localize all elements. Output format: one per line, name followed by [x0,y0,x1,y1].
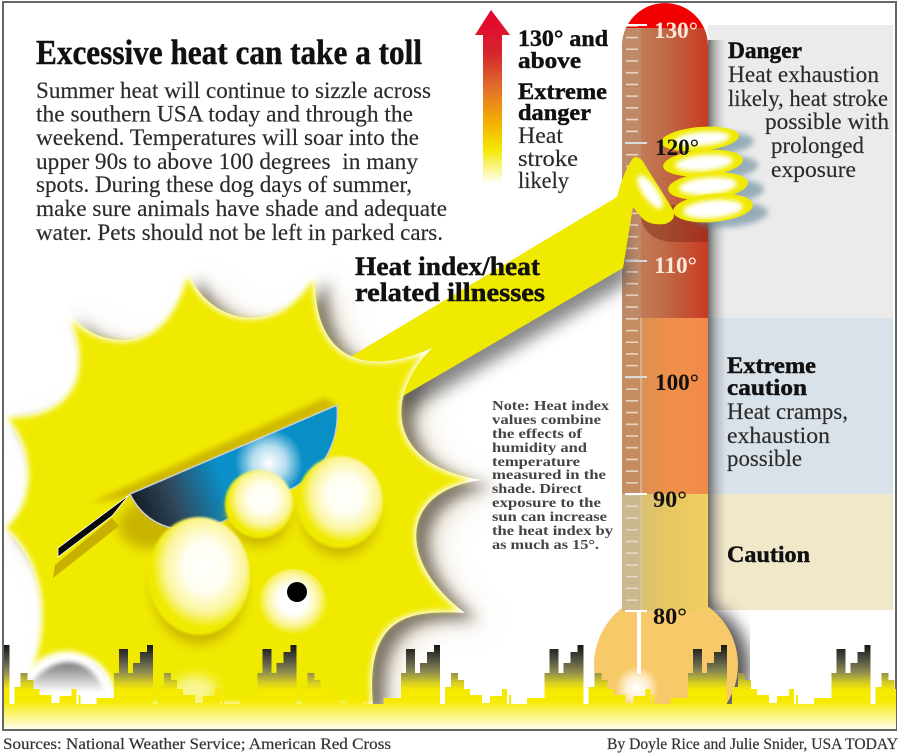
label: extreme danger: Extreme [518,79,607,104]
sun ambient beige shadow [100,286,490,704]
lower left valley [12,656,113,705]
label: caution: Caution [727,542,810,567]
intro text block: upper 90s to above 100 degrees in many [36,149,418,174]
label: danger: Danger [728,38,802,63]
panel: danger band [708,25,893,318]
note text: measured in the [492,467,606,482]
label: extreme caution: possible [727,446,802,471]
bulb shadow [708,596,750,704]
note text: Note: Heat index [492,398,609,413]
label: extreme caution: exhaustion [727,423,831,448]
panel: extreme caution band [708,318,893,494]
tick marks [625,25,647,611]
note text: shade. Direct [492,481,583,496]
finger 2 [662,147,744,179]
label: extreme danger: Heat [518,123,564,148]
thermometer degree labels [653,18,699,629]
intro text block: weekend. Temperatures will soar into the [36,125,419,150]
lens underside shadow [118,501,182,549]
label: danger: exposure [771,157,856,182]
intro text block: water. Pets should not be left in parked cars. [36,220,443,245]
sun beam arm [340,157,674,396]
thermometer degree labels: 120° [655,135,699,160]
thermometer degree labels: 130° [654,18,698,43]
note text: temperature [492,454,580,469]
finger shadows [677,130,769,230]
note text: exposure to the [492,495,601,510]
label: danger: likely, heat stroke [728,86,888,111]
source credit: Sources: National Weather Service; American Red Cross [3,736,391,753]
thermometer bulb [594,606,738,704]
eye [259,569,327,637]
arrow: rising heat [475,10,510,184]
note text: sun can increase [492,509,607,524]
label: extreme danger: likely [518,168,569,193]
byline: By Doyle Rice and Julie Snider, USA TODAY [607,736,898,753]
thumb highlight [633,172,667,212]
label: extreme danger: above [518,48,581,73]
finger 4 [672,191,754,225]
heat index heading [355,252,545,307]
sun shadow [16,277,495,712]
small lower glow [173,676,217,704]
note text: as much as 15°. [492,537,599,552]
label: extreme caution [727,353,848,471]
hand shadow on tube [640,205,708,242]
thermometer tube [620,0,712,611]
thermometer degree labels: 100° [655,370,699,395]
thermometer [594,0,750,738]
tube shadow [708,40,726,610]
sun character [3,157,674,715]
label: extreme danger: danger [518,100,591,125]
intro text block: Summer heat will continue to sizzle across [36,78,431,103]
note text: the effects of [492,426,583,441]
thermometer degree labels: 90° [653,487,687,512]
sunglasses arm [53,495,129,578]
label: extreme caution: caution [727,375,807,400]
intro text block [36,78,447,245]
label: danger: Heat exhaustion [728,62,879,87]
thermometer degree labels: 110° [654,253,697,278]
finger 1 [660,124,740,154]
nose sphere [225,470,293,538]
sun body [3,270,482,705]
label: extreme danger: 130° and [518,26,608,51]
right cheek sphere [297,456,383,548]
sun glow edge [3,270,482,705]
heat index heading: Heat index/heat [355,252,540,281]
mercury stem and glow [615,612,659,710]
big cheek sphere [148,517,250,635]
skyline [0,645,900,730]
label: danger: prolonged [771,133,864,158]
label: extreme danger: stroke [518,146,578,171]
label: danger: possible with [765,109,890,134]
note text: values combine [492,412,601,427]
cheek and nose shadows [153,476,378,644]
label: extreme caution: Extreme [727,353,816,378]
finger 3 [667,169,749,203]
note text [492,398,613,552]
label: extreme caution: Heat cramps, [727,399,848,424]
intro text block: spots. During these dog days of summer, [36,172,412,197]
panel: caution band [708,494,893,610]
thermometer degree labels: 80° [653,604,687,629]
label: danger [728,38,890,182]
intro text block: the southern USA today and through the [36,102,413,126]
note text: the heat index by [492,523,613,538]
brow shadow [90,398,338,503]
intro text block: make sure animals have shade and adequate [36,196,447,221]
title: Excessive heat can take a toll [36,33,422,72]
hand fingers [660,124,754,225]
sunglasses lens [130,405,337,531]
heat index heading: related illnesses [355,278,545,307]
beam shadow [402,216,638,416]
label: extreme danger [518,26,608,193]
note text: humidity and [492,440,588,455]
